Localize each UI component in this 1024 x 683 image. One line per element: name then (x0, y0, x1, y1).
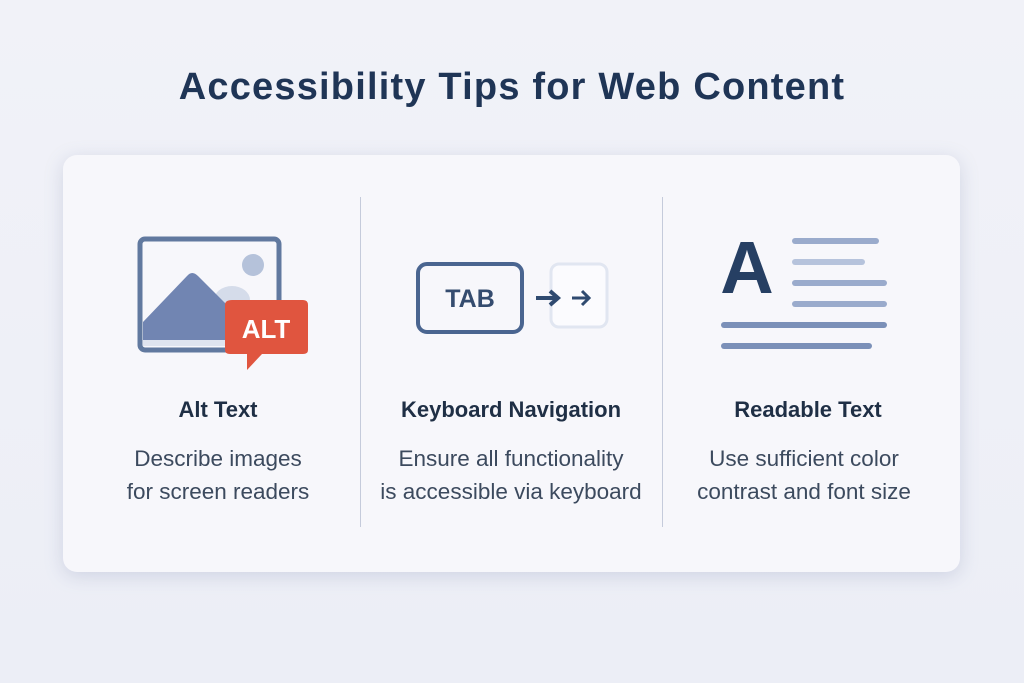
text: alt text desc: Describe images (134, 446, 302, 471)
title: Accessibility Tips for Web Content (179, 66, 845, 108)
icon: image with alt text: ALT (242, 314, 290, 344)
text: alt text desc (127, 446, 309, 504)
icon: tab key (416, 262, 608, 334)
text: alt text desc: for screen readers (127, 479, 309, 504)
heading: keyboard: Keyboard Navigation (401, 397, 621, 422)
panel: tips card (63, 155, 960, 572)
icon: tab key: TAB (445, 285, 495, 313)
icon: image with alt text (138, 236, 308, 370)
heading: alt text: Alt Text (178, 397, 258, 422)
text: keyboard desc: Ensure all functionality (398, 446, 624, 471)
text: readable desc: contrast and font size (697, 479, 911, 504)
text: readable desc (697, 446, 911, 504)
text: keyboard desc: is accessible via keyboard (380, 479, 642, 504)
heading: readable: Readable Text (734, 397, 882, 422)
text: keyboard desc (380, 446, 642, 504)
text: readable desc: Use sufficient color (709, 446, 899, 471)
